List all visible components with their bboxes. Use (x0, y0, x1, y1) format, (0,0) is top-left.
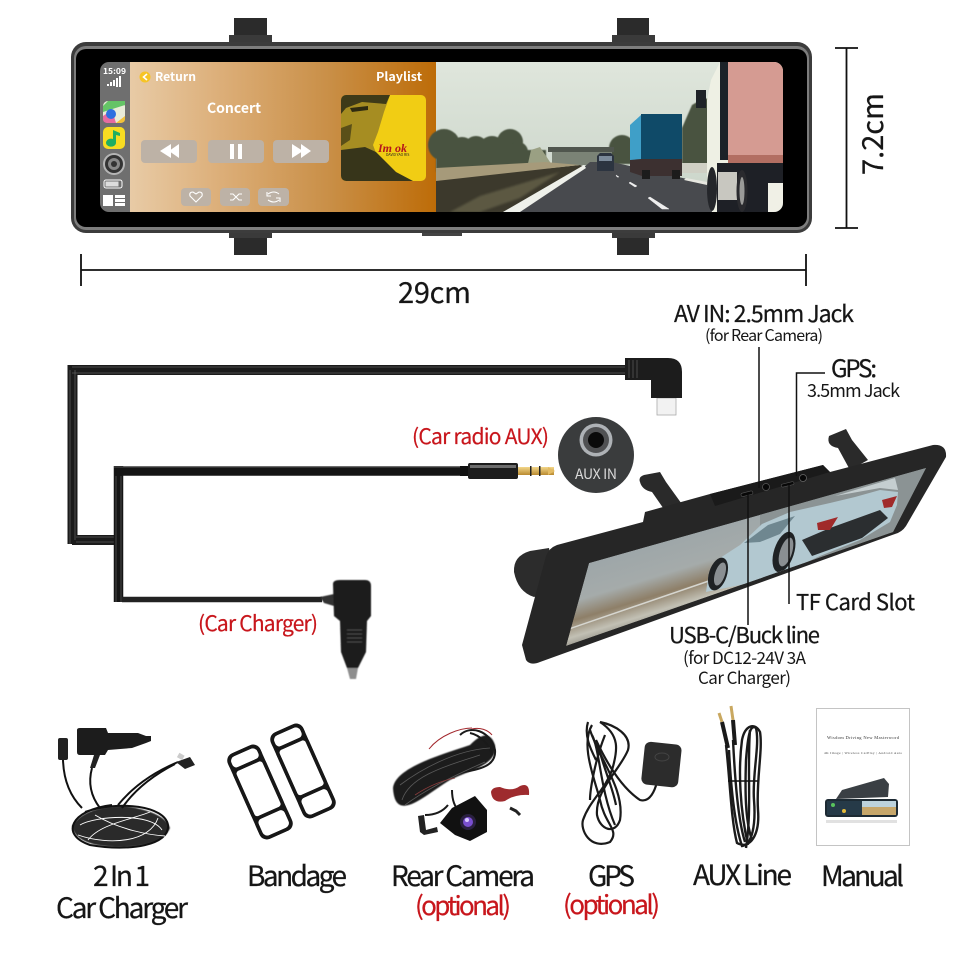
height dimension: 7.2cm (835, 48, 892, 228)
mirror front view (71, 18, 812, 255)
road photo (428, 62, 783, 212)
wiring diagram (70, 358, 682, 679)
label: GPS jack (807, 349, 900, 403)
large truck (707, 62, 728, 212)
label: USB-C buck line: Car Charger) (698, 664, 791, 689)
mirror body (71, 42, 812, 233)
accessory labels (56, 854, 904, 927)
label: AV IN (674, 295, 854, 346)
cable to AUX plug (114, 466, 462, 602)
accessory: rear camera (393, 728, 529, 841)
ports (741, 474, 806, 497)
label: car radio aux: (Car radio AUX) (412, 421, 549, 451)
mounting clips (229, 18, 655, 255)
music player panel: Playlist (376, 68, 422, 85)
screen with sports car (566, 460, 930, 646)
width dimension: 29cm: 29cm (398, 270, 471, 312)
accessory: manual: 4K Image | Wireless CarPlay | Android Auto (824, 751, 902, 755)
screen (100, 62, 783, 212)
label: GPS jack: GPS: (831, 349, 877, 384)
album cover: DAVID YAO RIS (386, 153, 409, 158)
trees (428, 98, 712, 172)
car body (706, 490, 898, 592)
cable to USB-C (70, 365, 630, 544)
label: bandage: Bandage (247, 855, 347, 895)
label: rear camera optional (391, 855, 535, 923)
label: 2 in 1 car charger: Car Charger (56, 887, 188, 927)
blue truck (630, 115, 641, 165)
carplay sidebar: 15:09 (103, 66, 126, 77)
road (504, 162, 712, 212)
car charger plug (320, 580, 371, 679)
accessory: GPS antenna (582, 722, 682, 844)
carplay sidebar (100, 62, 130, 212)
width dimension: 29cm (81, 254, 806, 312)
label: AV IN: (for Rear Camera) (705, 322, 823, 346)
label: USB-C buck line (669, 618, 820, 689)
music player panel: Concert (207, 98, 261, 118)
body (522, 445, 946, 664)
music player panel (130, 62, 436, 212)
label: GPS optional: (optional) (563, 885, 660, 922)
cable to car charger (122, 597, 322, 602)
distant car (597, 153, 614, 171)
album cover (341, 95, 426, 181)
label: GPS optional (563, 855, 660, 922)
label: manual: Manual (821, 855, 904, 895)
angled mirror view (514, 429, 946, 664)
AUX IN socket closeup (558, 417, 634, 493)
label: AV IN: AV IN: 2.5mm Jack (674, 295, 854, 329)
label: car charger: (Car Charger) (198, 608, 318, 638)
rear clips (640, 429, 868, 515)
label: USB-C buck line: USB-C/Buck line (669, 618, 820, 650)
embankment (436, 165, 586, 212)
accessory: bandage (227, 723, 336, 840)
accessory: manual (816, 708, 910, 846)
label: rear camera optional: Rear Camera (391, 855, 535, 895)
accessory: 2 in 1 car charger (58, 728, 195, 848)
label: rear camera optional: (optional) (415, 886, 511, 923)
AUX IN socket closeup: AUX IN (575, 464, 617, 484)
label: AUX line: AUX Line (693, 854, 792, 894)
label: 2 in 1 car charger: 2 In 1 (93, 855, 150, 895)
music player panel: Return (155, 68, 196, 85)
port callout lines (748, 347, 825, 625)
accessory: AUX line (719, 706, 761, 848)
mounting ball (514, 548, 556, 597)
height dimension: 7.2cm: 7.2cm (850, 93, 892, 175)
label: GPS jack: 3.5mm Jack (807, 377, 900, 403)
USB-C connector (625, 358, 682, 415)
accessory: manual: Wisdom Driving New Masterword (827, 735, 900, 740)
label: TF card slot: TF Card Slot (796, 585, 915, 617)
album cover: Im ok (377, 141, 407, 155)
AUX jack plug (460, 463, 555, 479)
label: GPS optional: GPS (588, 855, 635, 895)
label: 2 in 1 car charger (56, 855, 188, 927)
label: USB-C buck line: (for DC12-24V 3A (683, 644, 807, 669)
